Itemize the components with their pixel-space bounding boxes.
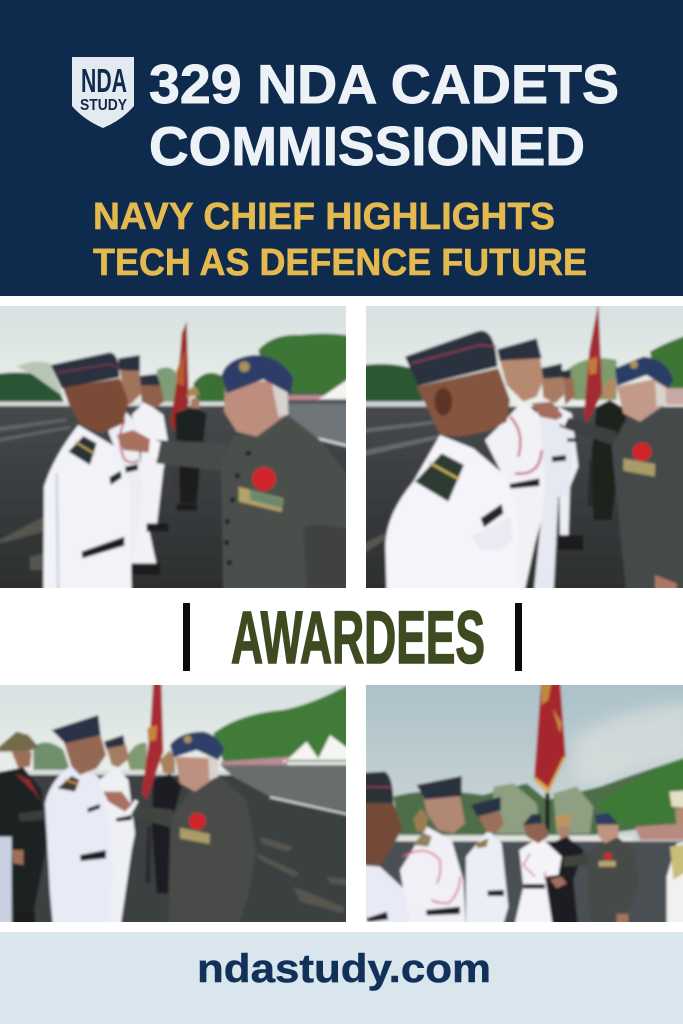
- subtitle: NAVY CHIEF HIGHLIGHTS: [93, 196, 555, 238]
- header panel: [0, 0, 683, 296]
- logo: NDA Study shield: [72, 57, 134, 128]
- cadet 1: [43, 425, 132, 597]
- flag: [170, 322, 189, 432]
- cadet front left: [353, 864, 410, 930]
- subtitle: [93, 196, 587, 284]
- background cadets: [558, 407, 578, 542]
- awardees heading: [183, 596, 522, 679]
- flag: [142, 680, 163, 800]
- title: COMMISSIONED: [149, 115, 585, 177]
- photo 4: line of cadets with flag: [366, 685, 683, 922]
- flag: [534, 680, 566, 793]
- footer band: [0, 932, 683, 1024]
- cadet 3: [130, 402, 168, 565]
- army guard: [175, 407, 207, 448]
- heading text: AWARDEES: [231, 596, 485, 679]
- logo: NDA Study shield: NDA: [81, 62, 127, 99]
- cadet third: [466, 830, 508, 930]
- flag: [584, 303, 602, 423]
- army guard: [602, 378, 617, 400]
- photo 3: officer with cadets and crowd: [0, 685, 346, 922]
- cadet far right: [667, 840, 683, 930]
- cadet front: [385, 435, 518, 597]
- cadet front: [45, 765, 113, 930]
- cadet behind: [98, 767, 135, 930]
- officer: [560, 415, 617, 447]
- army guard behind flag: [160, 750, 175, 773]
- officer: [563, 853, 593, 867]
- officer: [156, 440, 230, 472]
- cadet second: [400, 827, 466, 930]
- officer: [132, 805, 173, 828]
- army man left: [0, 732, 38, 752]
- subtitle: TECH AS DEFENCE FUTURE: [93, 242, 587, 284]
- right divider bar: [515, 603, 522, 671]
- cadet middle: [485, 400, 545, 597]
- left divider bar: [183, 603, 190, 671]
- photo 1: officer pinning first cadet: [0, 306, 346, 588]
- cadet fourth: [513, 837, 562, 930]
- background hat man: [413, 808, 428, 832]
- title: [149, 53, 619, 177]
- army guard: [555, 813, 572, 828]
- website address: ndastudy.com: [197, 947, 491, 991]
- cadet 2: [108, 410, 143, 563]
- title: 329 NDA CADETS: [149, 53, 619, 115]
- photo 2: officer pinning second cadet, close-up: [366, 306, 683, 588]
- logo: NDA Study shield: STUDY: [80, 97, 127, 114]
